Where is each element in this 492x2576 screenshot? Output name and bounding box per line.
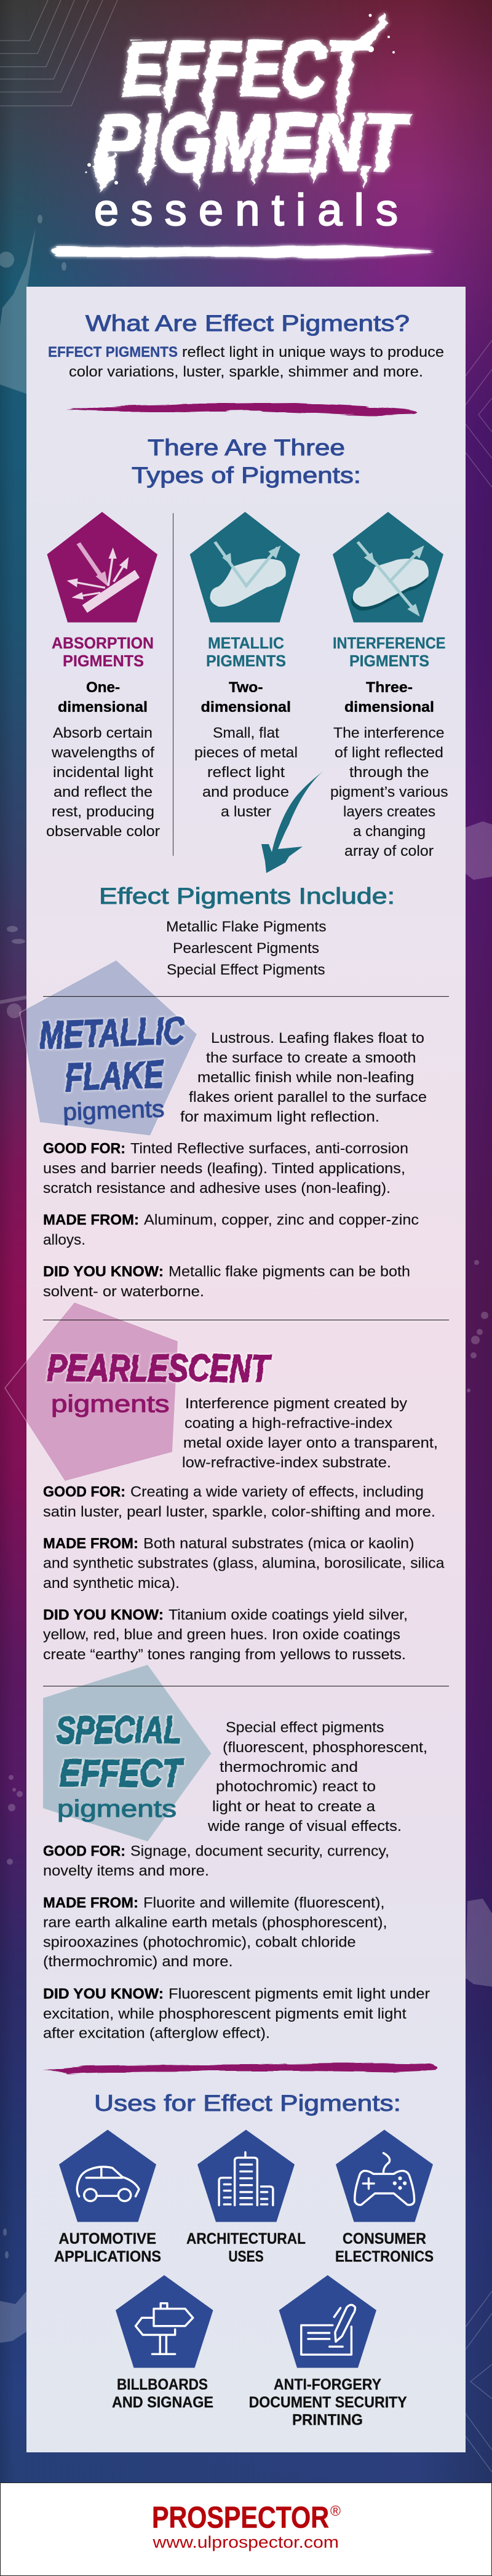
description: pearlescent: Interference pigment created by: [185, 1395, 407, 1412]
panel: special effect: [43, 1665, 449, 2041]
label: automotive: APPLICATIONS: [54, 2248, 161, 2265]
title brush stroke: [52, 245, 435, 258]
icon: signpost: [135, 2303, 193, 2354]
dimension: two: Two-: [229, 679, 263, 696]
content panel: [26, 287, 466, 2452]
special effect title: [56, 1709, 184, 1822]
use: consumer electronics: [335, 2130, 434, 2265]
good for: pearlescent: GOOD FOR:: [43, 1484, 125, 1501]
intro text: [48, 344, 444, 380]
label: metallic: METALLIC: [208, 634, 284, 652]
description: metallic flake: Lustrous. Leafing flakes float to: [211, 1030, 424, 1047]
list of pigment kinds: Metallic Flake Pigments: [166, 919, 327, 935]
did you know: pearlescent: [43, 1607, 408, 1663]
dimension: three: Three-: [366, 679, 413, 696]
description: special effect: [207, 1720, 427, 1835]
icon: buildings: [219, 2152, 273, 2205]
did you know: special effect: Fluorescent pigments emit light under: [169, 1986, 430, 2003]
pearlescent title: pigments: [51, 1391, 170, 1418]
made from: metallic flake: alloys.: [43, 1232, 85, 1248]
description: absorption: [46, 725, 160, 840]
pearlescent pentagon: [5, 1302, 178, 1481]
did you know: pearlescent: create “earthy” tones ranging from yellows to russets.: [43, 1646, 406, 1663]
title word: Effect Pigment: [92, 12, 410, 191]
list of pigment kinds: Special Effect Pigments: [167, 962, 325, 978]
divider: [43, 996, 449, 997]
description: absorption: and reflect the: [54, 784, 153, 800]
good for: special effect: GOOD FOR:: [43, 1843, 125, 1859]
made from: special effect: MADE FROM:: [43, 1894, 138, 1911]
panel: pearlescent: [5, 1302, 449, 1663]
made from: metallic flake: Aluminum, copper, zinc and copper-zinc: [144, 1212, 419, 1229]
good for: metallic flake: [43, 1141, 408, 1197]
heading: three types: There Are Three: [148, 435, 345, 460]
description: special effect: thermochromic and: [220, 1759, 358, 1776]
description: interference: of light reflected: [335, 744, 443, 761]
purple brush divider lower: [42, 2063, 437, 2073]
did you know: pearlescent: DID YOU KNOW:: [43, 1607, 164, 1624]
intro text: color variations, luster, sparkle, shimmer and more.: [69, 364, 423, 380]
title: [52, 12, 435, 258]
description: interference: pigment’s various: [330, 784, 448, 800]
label: anti-forgery: PRINTING: [292, 2412, 363, 2429]
description: metallic: pieces of metal: [194, 744, 298, 761]
description: metallic: [194, 725, 298, 820]
made from: special effect: (thermochromic) and more.: [43, 1953, 233, 1970]
label: absorption: [52, 634, 154, 670]
footer: [0, 2483, 492, 2575]
special effect title: SPECIAL: [56, 1709, 181, 1752]
special effect pentagon: [43, 1665, 211, 1841]
dimension: two: [200, 679, 291, 716]
did you know: pearlescent: Titanium oxide coatings yield silver,: [169, 1607, 408, 1624]
description: special effect: wide range of visual effects.: [207, 1818, 402, 1835]
label: absorption: ABSORPTION: [52, 634, 154, 652]
label: anti-forgery: ANTI-FORGERY: [274, 2376, 381, 2393]
dimension: one: dimensional: [58, 699, 148, 716]
icon: absorption: [47, 512, 157, 623]
did you know: metallic flake: [43, 1264, 410, 1300]
label: automotive: [54, 2230, 161, 2265]
good for: pearlescent: Creating a wide variety of effects, including: [130, 1484, 424, 1501]
description: absorption: incidental light: [53, 764, 153, 781]
did you know: pearlescent: yellow, red, blue and green hues. Iron oxide coatings: [43, 1627, 400, 1643]
title splatter: [85, 14, 395, 185]
description: absorption: observable color: [46, 823, 160, 840]
description: metallic flake: flakes orient parallel to the surface: [189, 1089, 427, 1106]
intro text: EFFECT PIGMENTS: [48, 344, 178, 361]
label: consumer electronics: ELECTRONICS: [335, 2248, 434, 2265]
label: consumer electronics: CONSUMER: [343, 2230, 426, 2247]
did you know: metallic flake: DID YOU KNOW:: [43, 1264, 164, 1280]
did you know: metallic flake: solvent- or waterborne.: [43, 1283, 204, 1300]
use: anti-forgery: [249, 2275, 407, 2429]
made from: special effect: rare earth alkaline earth metals (phosphorescent),: [43, 1915, 387, 1931]
good for: metallic flake: scratch resistance and adhesive uses (non-leafing).: [43, 1180, 391, 1197]
description: special effect: Special effect pigments: [226, 1720, 384, 1736]
list of pigment kinds: [166, 919, 327, 978]
label: architectural: ARCHITECTURAL: [186, 2230, 306, 2247]
dimension: two: dimensional: [200, 699, 291, 716]
made from: metallic flake: MADE FROM:: [43, 1212, 139, 1229]
label: architectural: USES: [228, 2248, 264, 2265]
did you know: metallic flake: Metallic flake pigments can be both: [169, 1264, 410, 1280]
special effect title: EFFECT: [60, 1752, 184, 1795]
description: pearlescent: coating a high-refractive-index: [184, 1415, 392, 1432]
icon: gamepad: [355, 2153, 415, 2205]
description: interference: array of color: [344, 843, 434, 859]
pearlescent title: [47, 1347, 272, 1418]
description: absorption: rest, producing: [52, 804, 154, 820]
label: metallic: PIGMENTS: [206, 652, 286, 670]
label: metallic: [206, 634, 286, 670]
label: billboards: [112, 2376, 213, 2411]
good for: special effect: novelty items and more.: [43, 1863, 209, 1880]
arrow: brush down: [261, 771, 323, 873]
icon: metallic: [190, 512, 300, 623]
description: pearlescent: low-refractive-index substrate.: [182, 1454, 391, 1471]
label: billboards: BILLBOARDS: [117, 2376, 208, 2393]
logo: prospector: ®: [330, 2503, 341, 2519]
icon: interference: [333, 512, 443, 623]
vertical divider: [173, 513, 174, 856]
made from: special effect: spirooxazines (photochromic), cobalt chloride: [43, 1934, 356, 1951]
good for: pearlescent: [43, 1484, 435, 1520]
label: architectural: [186, 2230, 306, 2265]
made from: special effect: [43, 1894, 387, 1970]
divider: [43, 1686, 449, 1687]
heading: effect pigments include: Effect Pigments Include:: [99, 883, 395, 909]
dimension: three: dimensional: [344, 699, 434, 716]
description: special effect: photochromic) react to: [216, 1779, 376, 1795]
did you know: special effect: [43, 1986, 430, 2041]
made from: pearlescent: Both natural substrates (mica or kaolin): [143, 1536, 415, 1552]
label: interference: PIGMENTS: [349, 652, 429, 670]
description: interference: [330, 725, 448, 859]
label: interference: [333, 634, 445, 670]
metallic flake pentagon: [20, 960, 197, 1136]
good for: metallic flake: Tinted Reflective surfaces, anti-corrosion: [130, 1141, 408, 1157]
description: pearlescent: [182, 1395, 438, 1471]
did you know: special effect: after excitation (afterglow effect).: [43, 2025, 270, 2041]
use: billboards: [112, 2275, 213, 2411]
made from: metallic flake: [43, 1212, 419, 1248]
intro text: reflect light in unique ways to produce: [182, 344, 444, 361]
description: metallic: and produce: [202, 784, 289, 800]
description: special effect: light or heat to create a: [212, 1798, 376, 1815]
panel: metallic pigments: [190, 512, 300, 820]
label: anti-forgery: DOCUMENT SECURITY: [249, 2394, 407, 2411]
good for: special effect: Signage, document security, currency,: [130, 1843, 389, 1859]
label: billboards: AND SIGNAGE: [112, 2394, 213, 2411]
heading: what are effect pigments: What Are Effect Pigments?: [85, 311, 410, 336]
label: consumer electronics: [335, 2230, 434, 2265]
description: absorption: wavelengths of: [51, 744, 154, 761]
pearlescent title: PEARLESCENT: [47, 1347, 272, 1390]
description: metallic: reflect light: [207, 764, 285, 781]
title word: Effect Pigment: PIGMENT: [94, 97, 410, 188]
purple brush divider: [66, 403, 416, 416]
icon: car: [77, 2167, 139, 2201]
did you know: special effect: excitation, while phosphorescent pigments emit light: [43, 2006, 407, 2022]
dimension: one: [58, 679, 148, 716]
icon: document and pen: [301, 2305, 355, 2355]
description: special effect: (fluorescent, phosphorescent,: [223, 1739, 427, 1756]
description: metallic: Small, flat: [213, 725, 279, 741]
use: automotive: [54, 2130, 161, 2265]
logo: prospector: PROSPECTOR: [152, 2501, 329, 2534]
label: absorption: PIGMENTS: [63, 652, 144, 670]
special effect title: pigments: [57, 1796, 177, 1822]
title word: essentials: essentials: [94, 186, 398, 235]
good for: metallic flake: GOOD FOR:: [43, 1141, 125, 1157]
good for: metallic flake: uses and barrier needs (leafing). Tinted applications,: [43, 1160, 405, 1177]
use: architectural: [186, 2130, 306, 2265]
description: absorption: Absorb certain: [53, 725, 153, 741]
title word: Effect Pigment: EFFECT: [122, 25, 369, 113]
divider: [43, 1319, 449, 1320]
did you know: special effect: DID YOU KNOW:: [43, 1986, 164, 2003]
heading: uses: Uses for Effect Pigments:: [94, 2091, 401, 2116]
description: metallic flake: for maximum light reflection.: [180, 1109, 379, 1125]
made from: pearlescent: [43, 1536, 445, 1592]
made from: special effect: Fluorite and willemite (fluorescent),: [143, 1894, 385, 1911]
metallic flake title: [39, 1010, 188, 1127]
panel: uses: [54, 2130, 434, 2429]
description: interference: layers creates: [343, 804, 435, 820]
metallic flake title: FLAKE: [64, 1053, 165, 1099]
description: interference: through the: [349, 764, 429, 781]
label: automotive: AUTOMOTIVE: [58, 2230, 156, 2247]
dimension: three: [344, 679, 434, 716]
heading: three types: [132, 435, 361, 488]
description: interference: The interference: [333, 725, 444, 741]
description: metallic flake: the surface to create a smooth: [206, 1050, 416, 1066]
description: metallic flake: [180, 1030, 427, 1125]
website: www.ulprospector.com: [152, 2533, 339, 2551]
made from: pearlescent: MADE FROM:: [43, 1536, 138, 1552]
metallic flake title: pigments: [63, 1096, 165, 1126]
description: interference: a changing: [353, 823, 426, 840]
dimension: one: One-: [86, 679, 120, 696]
description: metallic: a luster: [221, 804, 271, 820]
good for: pearlescent: satin luster, pearl luster, sparkle, color-shifting and more.: [43, 1504, 435, 1520]
made from: pearlescent: and synthetic substrates (glass, alumina, borosilicate, silica: [43, 1555, 445, 1572]
metallic flake title: METALLIC: [39, 1010, 186, 1057]
panel: metallic flake: [20, 960, 449, 1300]
panel: absorption pigments: [46, 512, 160, 840]
description: pearlescent: metal oxide layer onto a transparent,: [183, 1435, 438, 1451]
label: anti-forgery: [249, 2376, 407, 2429]
good for: special effect: [43, 1843, 389, 1880]
description: metallic flake: metallic finish while non-leafing: [197, 1069, 415, 1086]
made from: pearlescent: and synthetic mica).: [43, 1575, 180, 1592]
list of pigment kinds: Pearlescent Pigments: [173, 940, 319, 957]
label: interference: INTERFERENCE: [333, 634, 445, 652]
panel: interference pigments: [330, 512, 448, 859]
heading: three types: Types of Pigments:: [132, 463, 361, 488]
